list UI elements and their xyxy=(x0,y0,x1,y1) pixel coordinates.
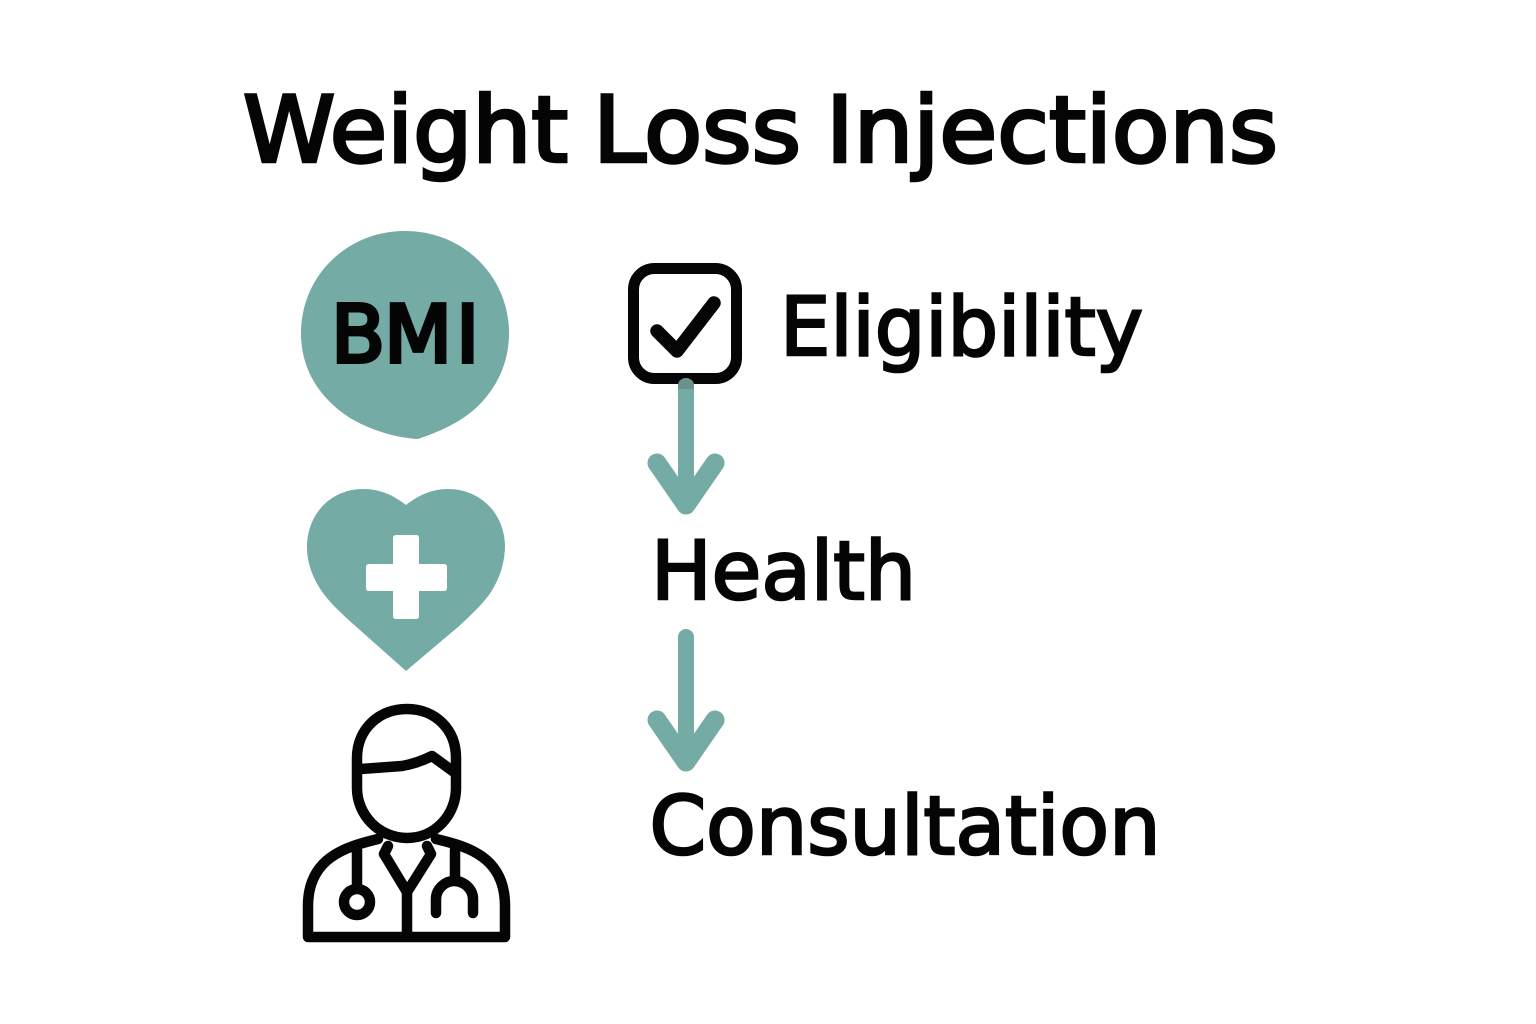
title: Weight xyxy=(243,78,568,183)
icon: doctor with stethoscope xyxy=(308,709,505,937)
arrow: health to consultation xyxy=(657,637,715,762)
arrow: eligibility to health xyxy=(657,378,715,505)
icon: BMI badge: BMI xyxy=(331,289,479,381)
icon: heart with cross xyxy=(307,489,505,671)
icon: eligibility checkbox xyxy=(634,268,736,378)
icon: BMI badge xyxy=(301,231,509,439)
label: Eligibility: Eligibility xyxy=(780,281,1143,375)
label: Health: Health xyxy=(651,525,916,619)
title xyxy=(243,78,1278,183)
title: Loss xyxy=(593,78,801,183)
label: Consultation: Consultation xyxy=(650,780,1160,874)
title: Injections xyxy=(826,78,1278,183)
